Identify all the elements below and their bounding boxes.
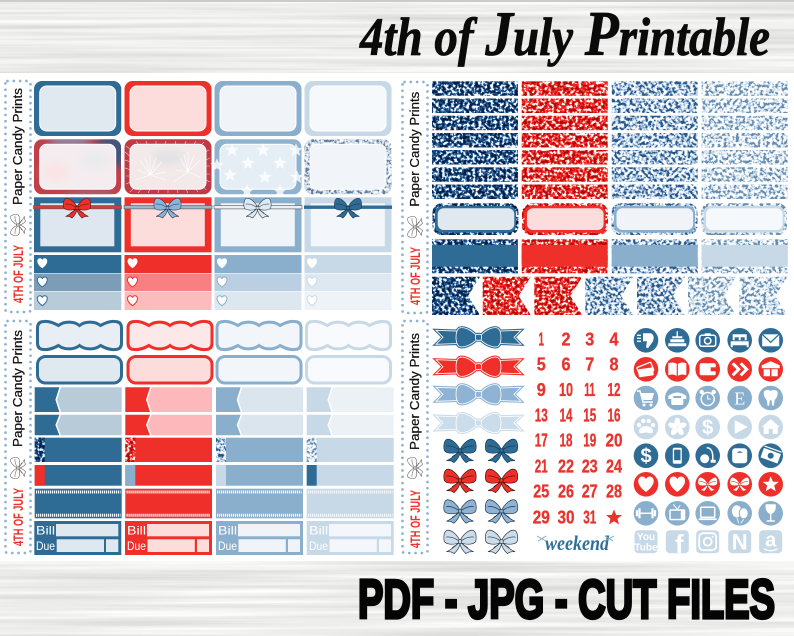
tracker: pale blue: Bill (309, 524, 328, 538)
row: stitched strips (35, 489, 394, 518)
icon: red star (606, 510, 622, 524)
date number grid: 12 (608, 380, 620, 400)
date number grid: 11 (584, 380, 595, 400)
side label: dotted frame (6, 81, 30, 312)
date number grid (533, 329, 622, 528)
icon: video brand badge: You (637, 532, 655, 543)
icon: bow one (695, 472, 720, 497)
icon: star (758, 472, 783, 497)
icon: laptop (695, 501, 720, 526)
date number grid: 30 (558, 508, 574, 528)
icon: envelope (758, 328, 783, 353)
icon: letter E: E (734, 388, 745, 408)
icon: double chevron (727, 357, 752, 382)
side label: title: 4TH OF JULY (11, 488, 26, 546)
icon: wine glass (758, 501, 783, 526)
row: glitter flags (432, 277, 787, 315)
icon: birthday cake (665, 328, 690, 353)
side label: brand: Paper Candy Prints (10, 329, 25, 447)
wood edge: top shadow (0, 0, 794, 2)
date number grid: 16 (608, 405, 620, 425)
icon: letter N badge (728, 530, 751, 555)
icon: video brand badge (634, 530, 658, 554)
icon: play button (727, 415, 752, 439)
date number grid: 28 (606, 482, 622, 502)
icon: letter f badge: f (675, 529, 684, 559)
icon: paw print (634, 415, 658, 439)
row: solid framed boxes (34, 81, 392, 136)
icon: dumbbell (634, 501, 658, 526)
icon: dollar sign (695, 415, 720, 439)
tracker: red: Bill (127, 524, 146, 538)
tracker: dark blue: Bill (36, 524, 55, 538)
icon: balloons (727, 501, 752, 526)
weekend script label: weekend (545, 531, 609, 555)
side label: dotted frame (402, 321, 428, 553)
icon: heart one (634, 472, 658, 497)
side label: title: 4TH OF JULY (408, 247, 423, 305)
strips: dark blue (34, 255, 121, 310)
date number grid: 4 (610, 329, 618, 349)
icon: banknotes (758, 443, 783, 468)
icon: television (665, 501, 690, 526)
icon: video brand badge: Tube (634, 543, 658, 554)
row: bill due trackers (34, 521, 394, 555)
tracker: mid blue: Due (218, 539, 237, 553)
icon: wallet (695, 357, 720, 382)
side label: title: 4TH OF JULY (408, 490, 423, 548)
date number grid: 26 (558, 482, 574, 502)
box: red with blue ribbon (124, 197, 212, 252)
box: white stars on blue (210, 139, 304, 197)
date number grid: 23 (582, 456, 598, 476)
date number grid: 17 (535, 431, 548, 451)
date number grid: 27 (582, 482, 598, 502)
icon: dollar sign: $ (702, 417, 713, 439)
icon: open book (665, 357, 690, 382)
row: solid strips with glitter tabs (35, 438, 394, 462)
glitter strips: dark blue (432, 81, 518, 199)
side label: dotted frame (402, 82, 428, 313)
date number grid: 9 (537, 380, 546, 400)
icon: letter a badge (759, 530, 782, 553)
tracker: red (125, 521, 212, 555)
tracker: pale blue: Due (309, 539, 328, 553)
icon: shopping cart (634, 386, 658, 410)
side label: brand: Paper Candy Prints (407, 332, 422, 450)
icon: camera badge (696, 530, 719, 553)
icon: flower (665, 415, 690, 439)
icon: parcel box (758, 357, 783, 382)
tracker: dark blue: Due (36, 539, 55, 553)
tracker: mid blue: Bill (218, 524, 237, 538)
icon: dollar coin: $ (640, 446, 652, 468)
date number grid: 22 (558, 456, 574, 476)
ribbon bow stickers (436, 328, 521, 433)
date number grid: 6 (562, 355, 570, 375)
icon: weighing scale (727, 443, 752, 468)
side label: title: 4TH OF JULY (11, 245, 26, 303)
strips: mid blue (214, 255, 302, 310)
small bow stickers (444, 439, 518, 554)
date number grid: 24 (606, 456, 622, 476)
side label: brand: Paper Candy Prints (10, 87, 25, 205)
row: patterned framed boxes (34, 139, 392, 194)
icon: credit cards (634, 357, 658, 382)
wood panel: bottom (0, 561, 794, 636)
date number grid: 31 (583, 508, 596, 528)
icon: letter N badge: N (732, 530, 748, 555)
date number grid: 7 (585, 355, 594, 375)
date number grid: 5 (537, 355, 546, 375)
icon: telephone (665, 386, 690, 410)
icon: outline bow (11, 215, 26, 235)
row: rounded labels (38, 356, 390, 383)
row: heart checklist strips (34, 255, 392, 310)
tracker: red: Due (127, 539, 146, 553)
panel: sheet one, framed boxes (6, 81, 392, 312)
icon: letter f badge (666, 529, 689, 559)
panel: sheet two, labels and trackers (6, 321, 394, 555)
icon: letter E (727, 386, 752, 410)
icon: bed (727, 328, 752, 353)
date number grid: 8 (610, 355, 618, 375)
box: pale blue with dark ribbon (304, 197, 392, 252)
date number grid: 3 (585, 329, 594, 349)
date number grid: 1 (539, 329, 544, 349)
row: glitter edged bands (432, 239, 788, 273)
glitter strips: mid blue (612, 81, 698, 199)
icon: letter a badge: a (765, 530, 777, 552)
panel: sheet three, glitter washi (402, 81, 788, 315)
row: glitter framed labels (432, 203, 787, 235)
row: notched flag strips (35, 387, 394, 435)
icon: house (758, 415, 783, 439)
icon: tooth (758, 386, 783, 410)
date number grid: 19 (583, 431, 596, 451)
date number grid: 20 (606, 431, 622, 451)
date number grid: 2 (562, 329, 570, 349)
wood panel: top (0, 0, 794, 73)
side label: dotted frame (6, 321, 30, 553)
date number grid: 29 (533, 508, 550, 528)
box: mid blue with white ribbon (214, 197, 302, 252)
icon: vacuum (695, 443, 720, 468)
date number grid: 13 (535, 405, 548, 425)
box: speckled pale blue (304, 139, 392, 194)
panel: sheet four, bows, dates, icons (402, 321, 783, 559)
row: scalloped labels (38, 321, 390, 350)
tracker: dark blue (34, 521, 121, 555)
icon: outline bow (11, 458, 26, 478)
strips: red (124, 255, 212, 310)
date number grid: 21 (535, 456, 548, 476)
row: solid strips with colour tabs (35, 465, 394, 486)
date number grid: 14 (560, 405, 572, 425)
icon: outline bow (408, 217, 423, 237)
box: dark blue with red ribbon (34, 197, 122, 252)
row: ribbon boxes (34, 197, 392, 252)
title: 4th of July Printable (359, 0, 770, 69)
icon: thumbs down (634, 328, 658, 353)
glitter strips: red (522, 81, 608, 199)
icon: mobile phone (665, 443, 690, 468)
side label: brand: Paper Candy Prints (407, 91, 422, 207)
icon: outline bow (408, 458, 423, 478)
icon: heart two (665, 472, 690, 497)
box: watercolour red and blue (34, 139, 121, 194)
icon: camera (695, 328, 720, 353)
date number grid: 15 (583, 405, 596, 425)
glitter strips: pale blue (702, 81, 788, 199)
tracker: mid blue (216, 521, 303, 555)
box: red fireworks (124, 139, 212, 194)
date number grid: 25 (533, 482, 549, 502)
icon grid (634, 328, 783, 559)
date number grid: 10 (559, 380, 573, 400)
date number grid: 18 (560, 431, 572, 451)
icon: dollar coin (634, 443, 658, 468)
tracker: pale blue (307, 521, 394, 555)
strips: pale blue (304, 255, 392, 310)
icon: alarm clock (695, 386, 720, 410)
icon: bow two (727, 472, 752, 497)
